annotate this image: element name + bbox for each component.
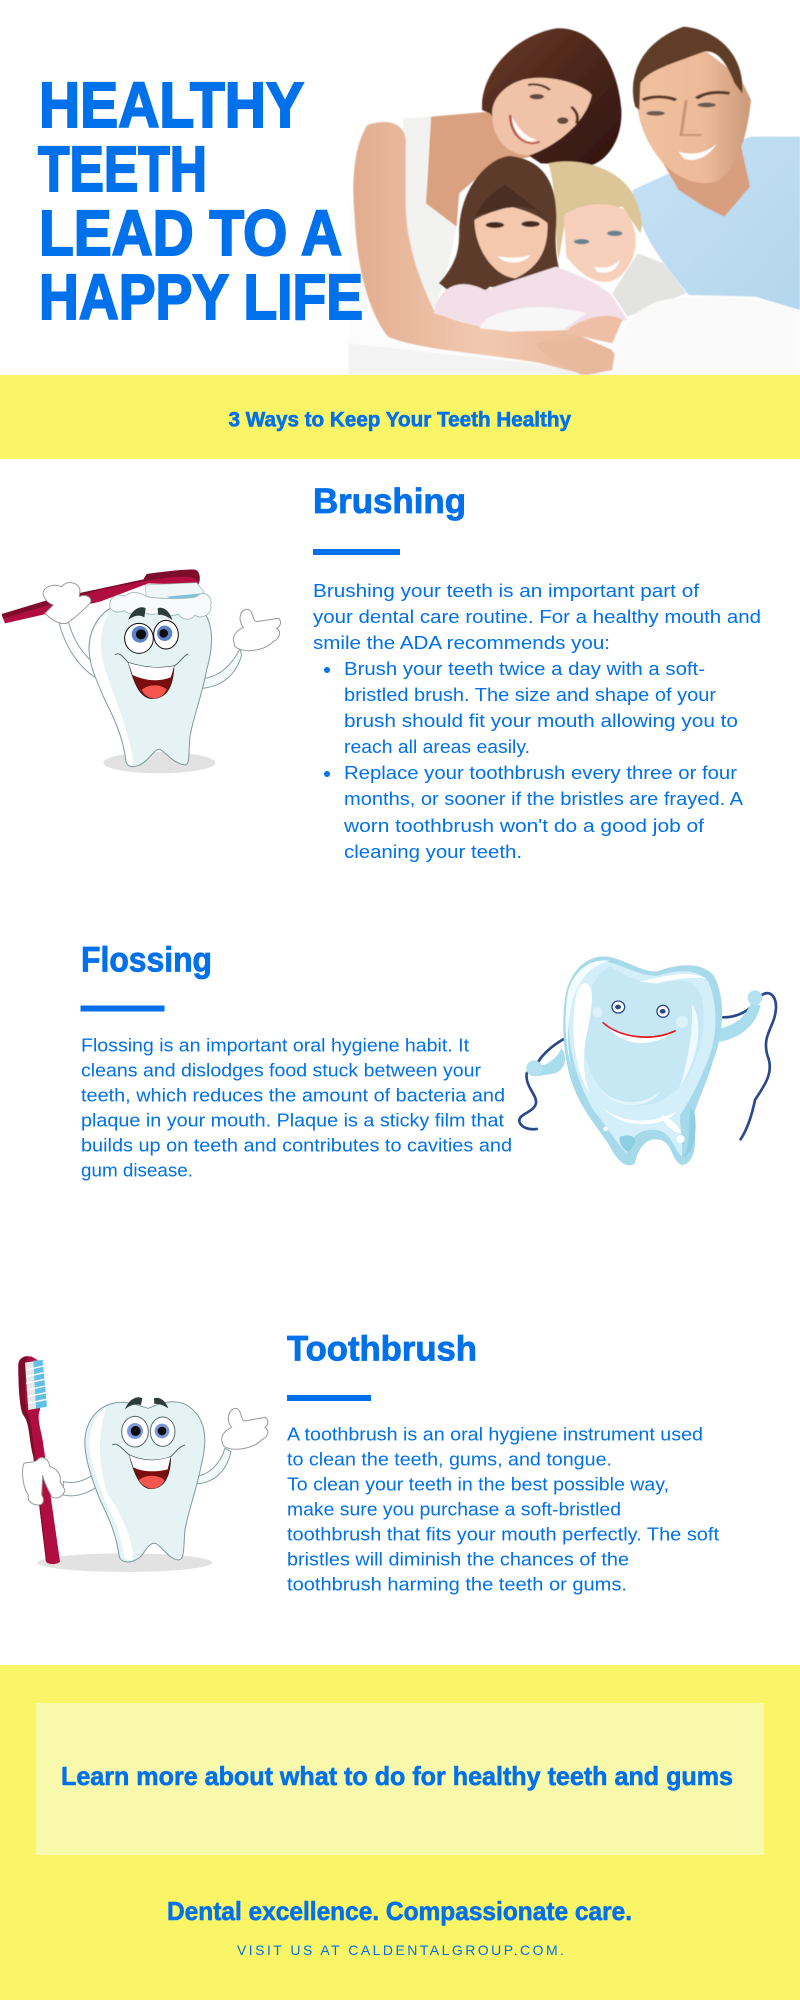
text block: toothbrush: A toothbrush is an oral hygiene instrument used (287, 1425, 703, 1445)
heading: toothbrush: Toothbrush (287, 1330, 477, 1369)
title (38, 69, 363, 333)
text block: toothbrush (287, 1425, 719, 1595)
accent bar: brushing (313, 549, 400, 555)
text block: flossing: Flossing is an important oral hygiene habit. It (81, 1036, 469, 1056)
text block: brushing intro: smile the ADA recommends you: (313, 633, 610, 653)
text block: toothbrush: bristles will diminish the chances of the (287, 1550, 629, 1570)
text block: flossing: builds up on teeth and contributes to cavities and (81, 1136, 512, 1156)
title: TEETH (38, 133, 207, 205)
panel: brushing (313, 482, 761, 862)
text block: brushing intro: your dental care routine. For a healthy mouth and (313, 607, 761, 627)
bullet list: brushing tips: worn toothbrush won't do a good job of (343, 816, 705, 836)
text block: toothbrush: To clean your teeth in the best possible way, (287, 1475, 669, 1495)
bullet list: brushing tips: reach all areas easily. (344, 737, 530, 757)
text block: flossing: cleans and dislodges food stuck between your (81, 1061, 481, 1081)
panel: flossing (80, 941, 512, 1181)
text block: toothbrush: toothbrush harming the teeth or gums. (287, 1575, 627, 1595)
subtitle band: 3 Ways to Keep Your Teeth Healthy (228, 409, 571, 432)
text block: toothbrush: to clean the teeth, gums, and tongue. (287, 1450, 612, 1470)
bullet list: brushing tips: Brush your teeth twice a day with a soft- (344, 659, 705, 679)
text block: flossing: plaque in your mouth. Plaque is a sticky film that (81, 1111, 504, 1131)
website link: VISIT US AT CALDENTALGROUP.COM. (237, 1942, 564, 1958)
accent bar: toothbrush (287, 1395, 371, 1401)
text block: brushing intro: Brushing your teeth is an important part of (313, 581, 700, 601)
subtitle band (0, 375, 800, 459)
accent bar: flossing (80, 1006, 164, 1012)
bullet list: brushing tips (324, 659, 743, 862)
bullet list: brushing tips: bristled brush. The size and shape of your (344, 685, 716, 705)
bullet list: brushing tips: months, or sooner if the bristles are frayed. A (344, 789, 743, 809)
bullet list: brushing tips: Replace your toothbrush every three or four (344, 763, 737, 783)
text block: flossing (81, 1036, 512, 1181)
icon: tooth holding a toothbrush (18, 1356, 268, 1572)
footer panel (0, 1665, 800, 2000)
icon: tooth brushing its head (2, 570, 281, 773)
callout: learn more (36, 1703, 764, 1855)
heading: flossing: Flossing (81, 941, 212, 980)
panel: toothbrush (287, 1330, 719, 1595)
text block: flossing: teeth, which reduces the amount of bacteria and (81, 1086, 505, 1106)
text block: toothbrush: make sure you purchase a soft-bristled (287, 1500, 621, 1520)
text block: flossing: gum disease. (81, 1161, 193, 1181)
photo: smiling family in bed (348, 27, 800, 375)
title: HAPPY LIFE (39, 261, 363, 333)
text block: brushing intro (313, 581, 761, 653)
heading: brushing: Brushing (313, 482, 466, 521)
title: LEAD TO A (39, 197, 342, 269)
bullet list: brushing tips: cleaning your teeth. (344, 842, 522, 862)
bullet list: brushing tips: brush should fit your mouth allowing you to (344, 711, 738, 731)
callout: learn more: Learn more about what to do for healthy teeth and gums (61, 1761, 733, 1791)
tagline: Dental excellence. Compassionate care. (167, 1896, 632, 1926)
title: HEALTHY (39, 69, 304, 141)
icon: glossy tooth with dental floss (519, 957, 776, 1165)
text block: toothbrush: toothbrush that fits your mouth perfectly. The soft (287, 1525, 719, 1545)
